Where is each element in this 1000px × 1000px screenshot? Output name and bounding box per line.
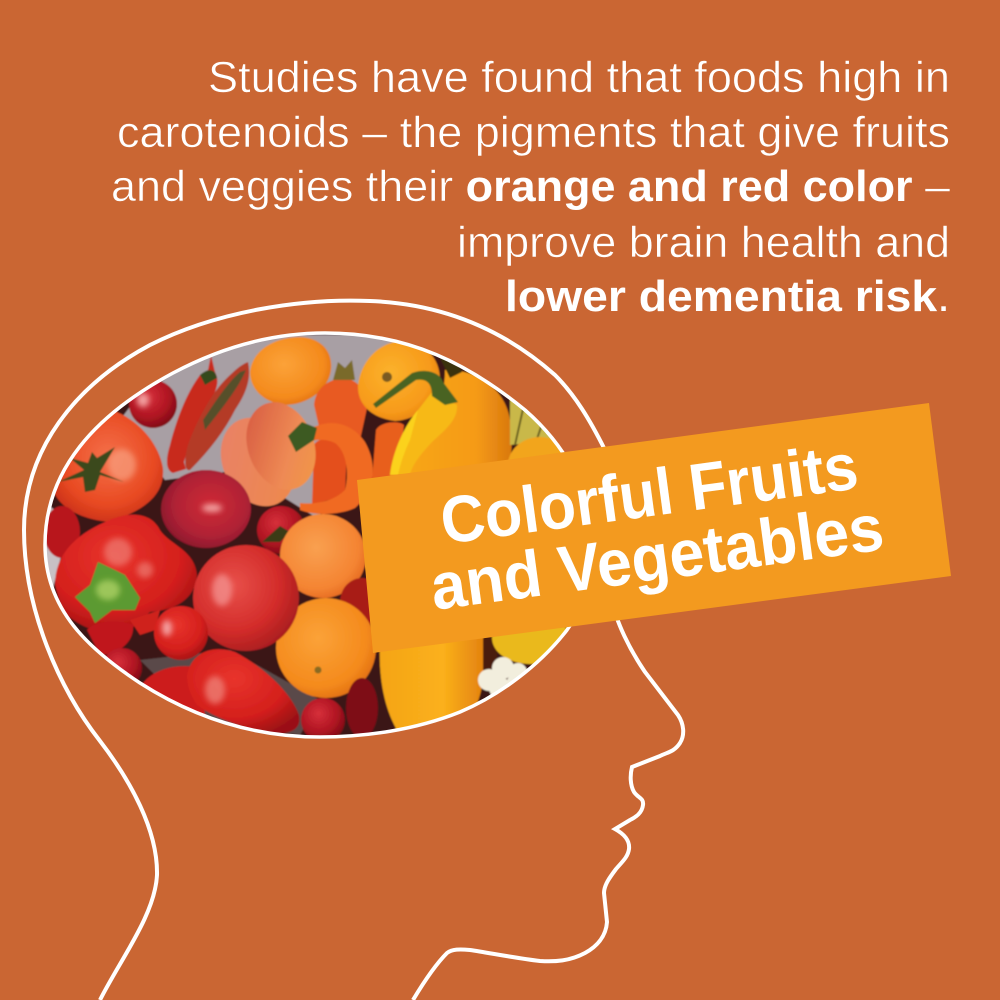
banner title: and Vegetables [426, 490, 888, 624]
intro text: lower dementia risk . [505, 272, 950, 321]
yellow fruit right [508, 436, 561, 460]
red bell pepper [55, 515, 197, 633]
pepper stem hook [373, 371, 458, 408]
tomato calyx [58, 447, 124, 492]
dark red pepper [346, 678, 378, 738]
bananas [508, 400, 551, 446]
left tomato edge [44, 506, 80, 558]
small red behind [339, 577, 370, 624]
orange top [250, 337, 331, 405]
persimmon [314, 378, 367, 440]
intro text: improve brain health and [457, 218, 950, 267]
long yellow pepper [378, 638, 484, 728]
red pepper left part [143, 666, 205, 715]
small tomato center [257, 506, 305, 554]
large tomato [193, 545, 299, 651]
large yellow orange pepper [410, 368, 513, 473]
banner [357, 403, 951, 653]
intro text: carotenoids – the pigments that give fruits [117, 108, 950, 157]
heirloom tomato [53, 410, 163, 522]
orange [276, 598, 376, 698]
dark gap [483, 630, 497, 670]
banner title [426, 428, 888, 624]
peach front lobe [246, 401, 316, 490]
head outline [24, 301, 683, 1000]
banner title: Colorful Fruits [436, 428, 862, 558]
orange chili curve [300, 423, 373, 514]
small tomato [154, 606, 208, 660]
inner red pepper [312, 439, 347, 505]
chili pepper two [185, 362, 249, 470]
lower bell lobes [87, 622, 133, 655]
brain outline [45, 333, 590, 737]
pepper calyx [75, 562, 140, 623]
cauliflower [478, 657, 527, 699]
long red pepper [187, 649, 299, 733]
brain food photo [40, 330, 600, 742]
bottom tomato [301, 698, 345, 742]
persimmon calyx [333, 360, 355, 380]
intro text: Studies have found that foods high in [208, 53, 950, 102]
peach back lobe [220, 417, 292, 508]
chili pepper one [167, 355, 217, 473]
carrot [372, 422, 404, 480]
small tomato lower left [106, 647, 143, 680]
small tomato top left [129, 380, 177, 428]
small dark stem [160, 380, 165, 382]
intro text [111, 53, 951, 321]
grey surface [122, 334, 396, 516]
yellow orange tomato [358, 341, 440, 421]
apricot fruit [280, 514, 366, 598]
small yellow pepper [398, 392, 458, 474]
intro text: and veggies their orange and red color – [111, 162, 951, 211]
lemon [492, 612, 568, 664]
plum [161, 470, 251, 548]
